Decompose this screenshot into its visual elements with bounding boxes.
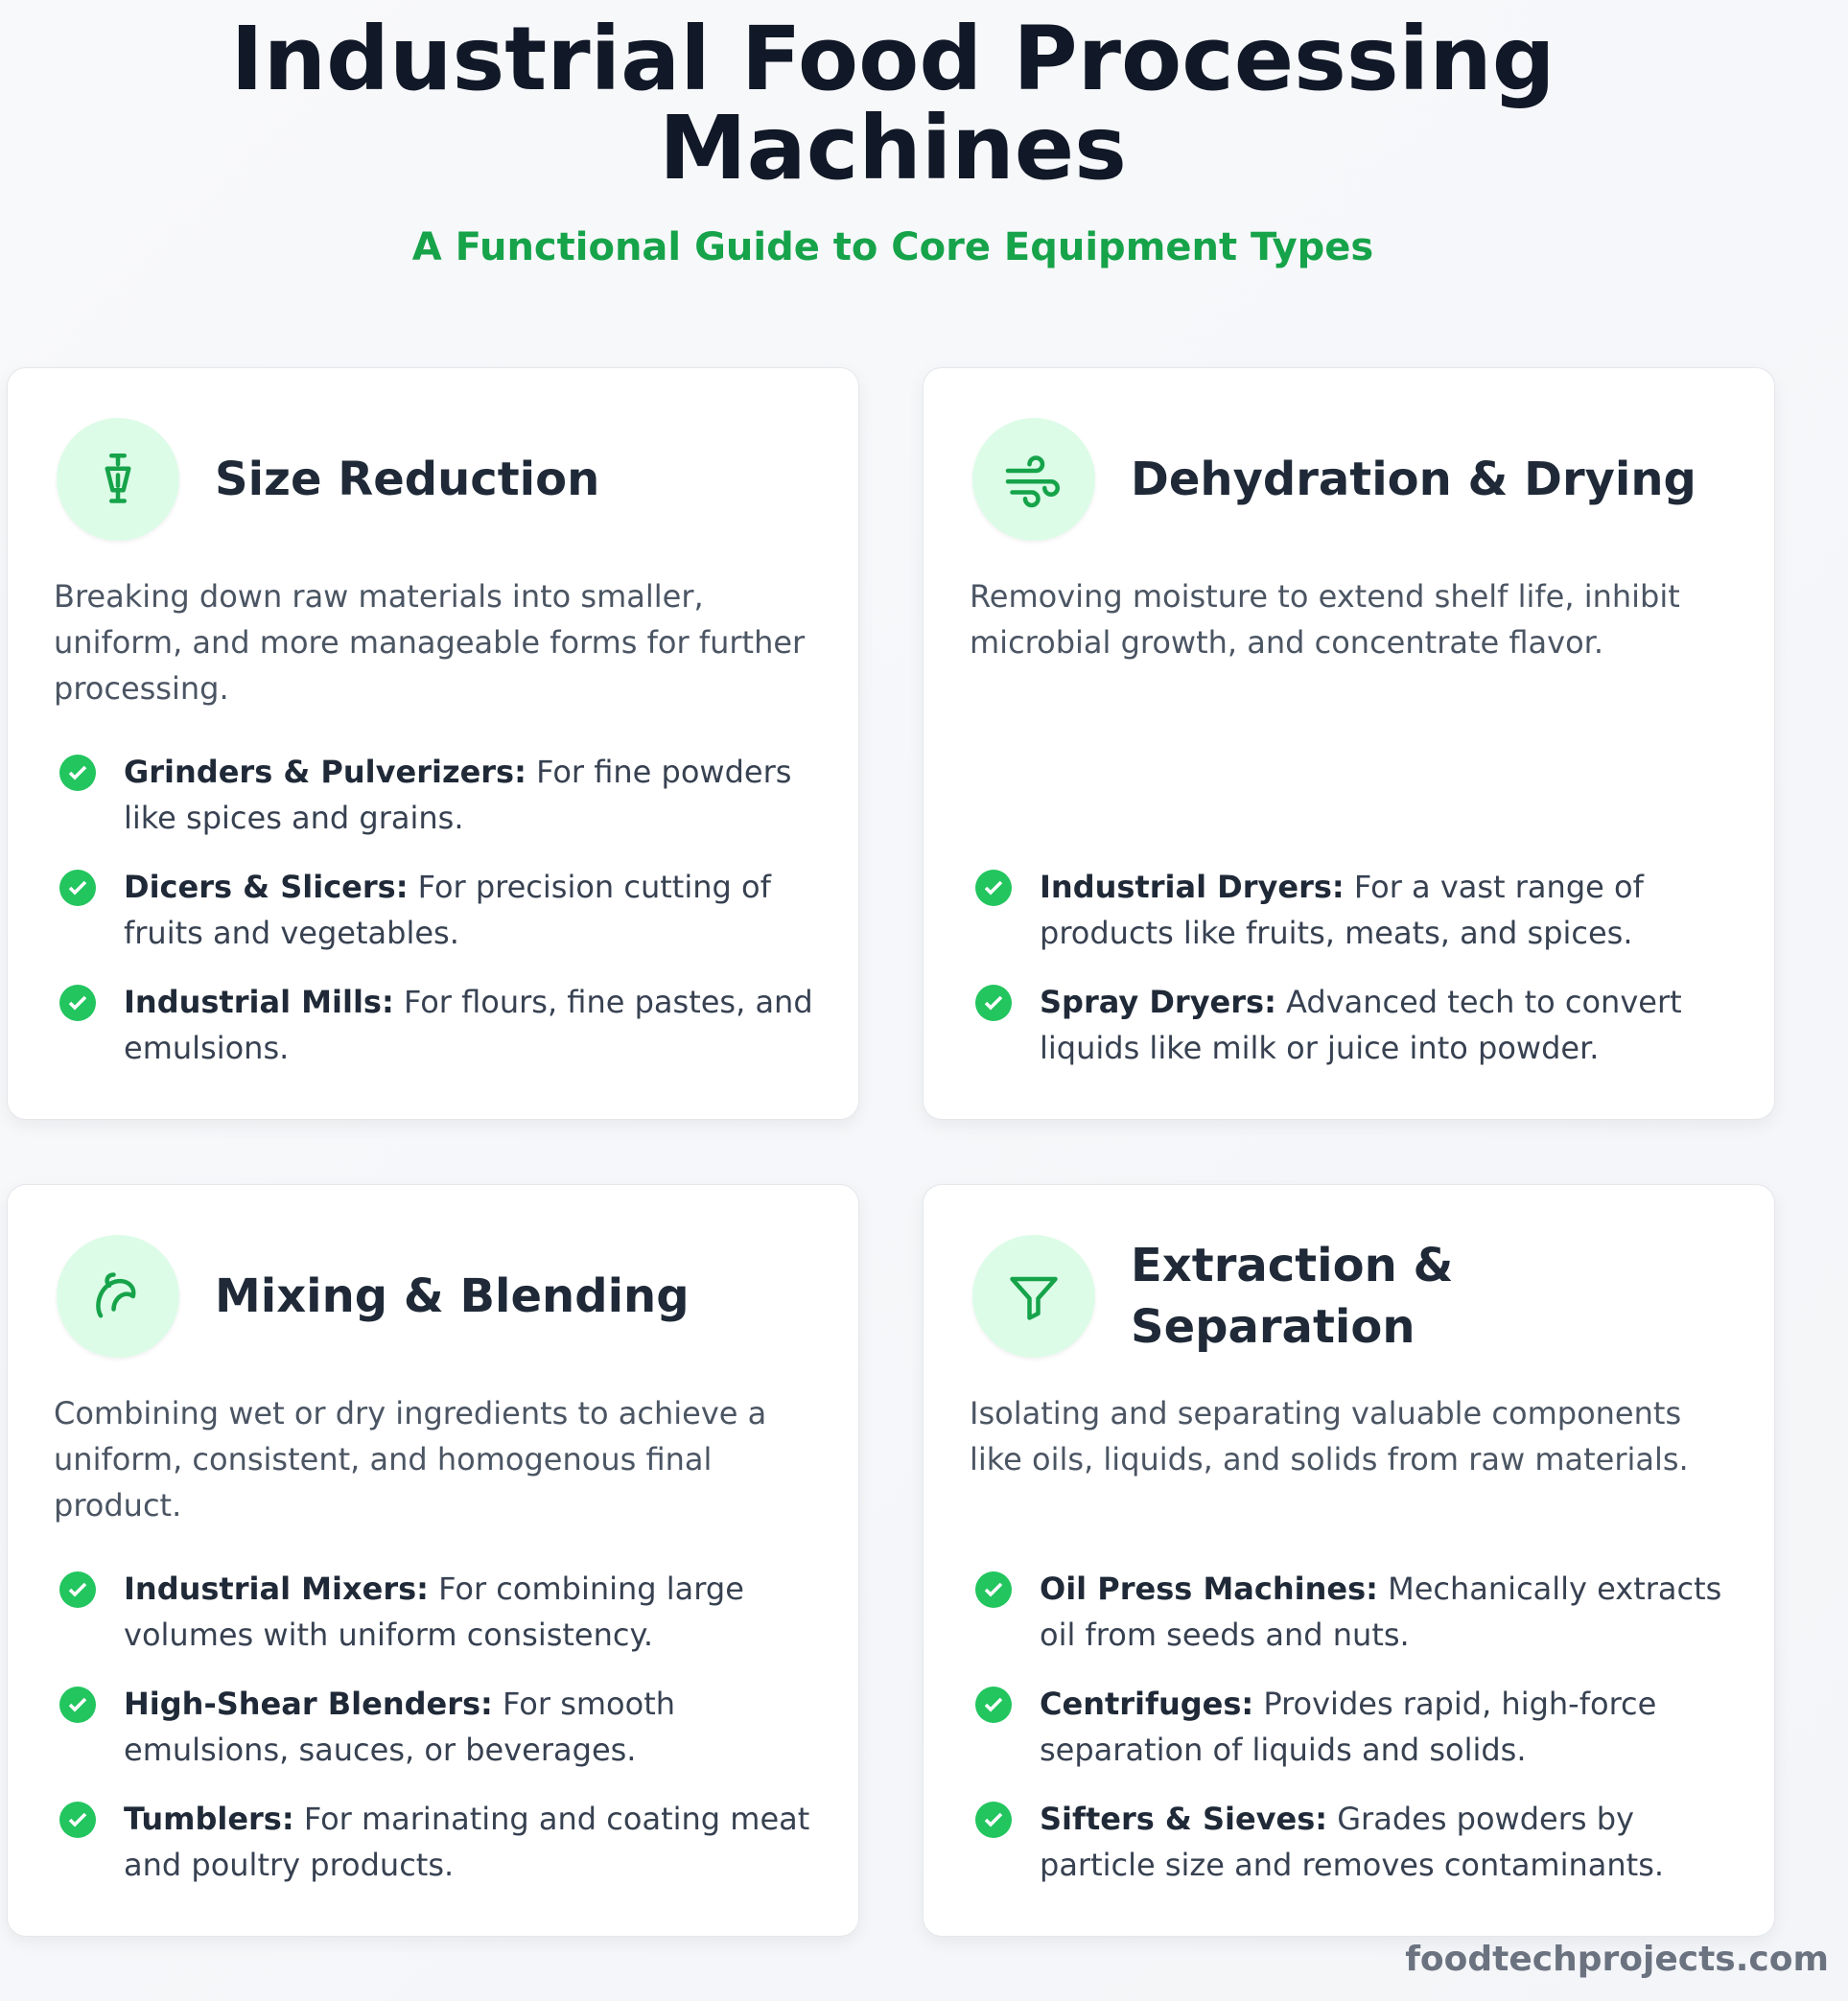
description bbox=[970, 578, 1680, 661]
subtitle: A Functional Guide to Core Equipment Types bbox=[412, 225, 1373, 269]
list item: Spray Dryers: Advanced tech to convert bbox=[1040, 984, 1682, 1020]
list item: Industrial Mixers: For combining large bbox=[124, 1571, 744, 1607]
icon: whisk bbox=[57, 1235, 179, 1358]
list item: Oil Press Machines: Mechanically extracts bbox=[1040, 1571, 1721, 1607]
list item: Centrifuges: Provides rapid, high-force bbox=[1040, 1686, 1656, 1722]
title bbox=[230, 8, 1556, 199]
description: like oils, liquids, and solids from raw materials. bbox=[970, 1441, 1689, 1477]
title: Machines bbox=[659, 97, 1127, 199]
list item: Industrial Dryers: For a vast range of bbox=[1040, 869, 1644, 905]
list item bbox=[59, 869, 771, 951]
icon: wind bbox=[972, 418, 1095, 541]
list item: volumes with uniform consistency. bbox=[124, 1617, 653, 1653]
list item bbox=[975, 984, 1682, 1066]
description: Combining wet or dry ingredients to achieve a bbox=[54, 1395, 766, 1431]
footer: source: foodtechprojects.com bbox=[1405, 1940, 1829, 1979]
list item: Dicers & Slicers: For precision cutting of bbox=[124, 869, 771, 905]
panel: mixing bbox=[7, 1184, 859, 1937]
description bbox=[970, 1395, 1689, 1477]
heading: Size Reduction bbox=[215, 453, 599, 506]
heading: Separation bbox=[1131, 1300, 1415, 1354]
description: product. bbox=[54, 1487, 181, 1524]
list item: like spices and grains. bbox=[124, 800, 464, 836]
list item bbox=[975, 1801, 1664, 1883]
description bbox=[54, 578, 806, 707]
list item bbox=[59, 984, 813, 1066]
heading: Mixing & Blending bbox=[215, 1269, 690, 1323]
list item: emulsions, sauces, or beverages. bbox=[124, 1732, 636, 1768]
list item: High-Shear Blenders: For smooth bbox=[124, 1686, 675, 1722]
list item: Industrial Mills: For flours, fine pastes, and bbox=[124, 984, 813, 1020]
list item bbox=[975, 869, 1644, 951]
description: Breaking down raw materials into smaller, bbox=[54, 578, 704, 615]
description: Isolating and separating valuable components bbox=[970, 1395, 1681, 1431]
list item: oil from seeds and nuts. bbox=[1040, 1617, 1410, 1653]
icon: grinder bbox=[57, 418, 179, 541]
list item: Tumblers: For marinating and coating meat bbox=[124, 1801, 809, 1837]
heading: Extraction & bbox=[1131, 1239, 1453, 1292]
list item bbox=[975, 1686, 1656, 1768]
description: uniform, and more manageable forms for further bbox=[54, 624, 805, 661]
panel: size reduction bbox=[7, 367, 859, 1120]
list item: separation of liquids and solids. bbox=[1040, 1732, 1527, 1768]
list item: Sifters & Sieves: Grades powders by bbox=[1040, 1801, 1634, 1837]
description: Removing moisture to extend shelf life, inhibit bbox=[970, 578, 1680, 615]
list item: particle size and removes contaminants. bbox=[1040, 1847, 1664, 1883]
panel: extraction bbox=[923, 1184, 1775, 1937]
list item bbox=[59, 754, 791, 836]
panel: dehydration bbox=[923, 367, 1775, 1120]
list item bbox=[975, 1571, 1721, 1653]
description: processing. bbox=[54, 670, 229, 707]
icon: funnel bbox=[972, 1235, 1095, 1358]
description: microbial growth, and concentrate flavor. bbox=[970, 624, 1603, 661]
list item: products like fruits, meats, and spices. bbox=[1040, 915, 1633, 951]
list item: and poultry products. bbox=[124, 1847, 454, 1883]
list item bbox=[59, 1686, 675, 1768]
title: Industrial Food Processing bbox=[230, 8, 1556, 110]
description bbox=[54, 1395, 766, 1524]
list item: liquids like milk or juice into powder. bbox=[1040, 1030, 1599, 1066]
heading bbox=[1131, 1239, 1453, 1354]
list item bbox=[59, 1571, 744, 1653]
list item: fruits and vegetables. bbox=[124, 915, 459, 951]
heading: Dehydration & Drying bbox=[1131, 453, 1696, 506]
list item: Grinders & Pulverizers: For fine powders bbox=[124, 754, 791, 790]
description: uniform, consistent, and homogenous final bbox=[54, 1441, 712, 1477]
list item bbox=[59, 1801, 809, 1883]
list item: emulsions. bbox=[124, 1030, 289, 1066]
